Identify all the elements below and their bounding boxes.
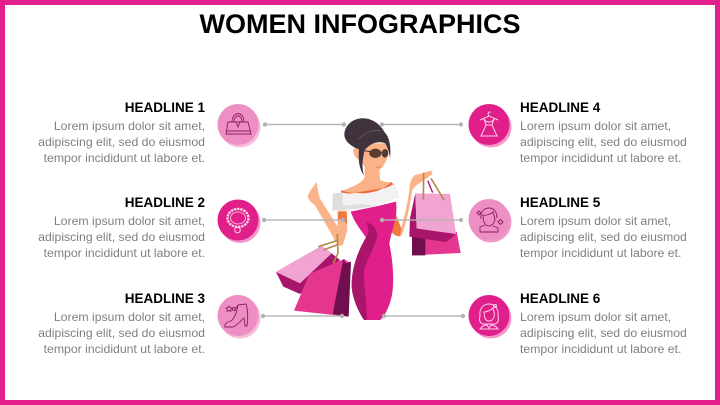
dress: [351, 202, 396, 320]
text block: headline 2: Lorem ipsum dolor sit amet,: [54, 214, 205, 228]
connector 2 left: [262, 218, 345, 222]
text block: headline 6: Lorem ipsum dolor sit amet,: [520, 310, 671, 324]
bag left pale: [276, 234, 340, 294]
text block: headline 2: [38, 195, 205, 260]
mouth: [375, 166, 381, 168]
icon: woman with sparkles: [468, 199, 512, 242]
icon: pearl necklace: [218, 200, 260, 243]
text block: headline 6: HEADLINE 6: [520, 291, 600, 306]
title: WOMEN INFOGRAPHICS: [200, 9, 520, 39]
icon: high heel shoe: [218, 295, 260, 338]
text block: headline 3: [38, 291, 205, 356]
text block: headline 4: adipiscing elit, sed do eiusmod: [520, 135, 687, 149]
text block: headline 4: Lorem ipsum dolor sit amet,: [520, 119, 671, 133]
text block: headline 2: adipiscing elit, sed do eiusmod: [38, 230, 205, 244]
icon: woman portrait: [468, 295, 512, 338]
connector 4 right: [380, 122, 463, 127]
text block: headline 5: [520, 195, 687, 260]
text block: headline 1: HEADLINE 1: [125, 100, 205, 115]
text block: headline 3: HEADLINE 3: [125, 291, 205, 306]
text block: headline 1: Lorem ipsum dolor sit amet,: [54, 119, 205, 133]
connector lines: [261, 122, 465, 318]
hair bun and strands: [344, 118, 390, 175]
text block: headline 2: tempor incididunt ut labore et.: [44, 246, 205, 260]
back bag right: [412, 232, 461, 255]
icon: dress on hanger: [468, 104, 512, 148]
text block: headline 3: Lorem ipsum dolor sit amet,: [54, 310, 205, 324]
text block: headline 4: [520, 100, 687, 165]
text block: headline 1: [38, 100, 205, 165]
white off-shoulder collar: [332, 183, 399, 211]
raised left arm: [308, 182, 347, 246]
connector 5 right: [380, 218, 463, 222]
text block: headline 3: tempor incididunt ut labore et.: [44, 342, 205, 356]
face: [361, 143, 388, 172]
right arm: [391, 170, 433, 236]
bag left dark: [294, 259, 351, 317]
text block: headline 6: adipiscing elit, sed do eiusmod: [520, 326, 687, 340]
text block: headline 3: adipiscing elit, sed do eiusmod: [38, 326, 205, 340]
sunglasses: [364, 149, 388, 158]
text block: headline 5: tempor incididunt ut labore et.: [520, 246, 681, 260]
text block: headline 4: HEADLINE 4: [520, 100, 600, 115]
text block: headline 1: adipiscing elit, sed do eiusmod: [38, 135, 205, 149]
text block: headline 6: [520, 291, 687, 356]
ear: [353, 147, 361, 160]
dress shading: [352, 223, 377, 320]
text block: headline 1: tempor incididunt ut labore et.: [44, 151, 205, 165]
connector 6 right: [382, 314, 465, 318]
text block: headline 6: tempor incididunt ut labore et.: [520, 342, 681, 356]
text block: headline 4: tempor incididunt ut labore et.: [520, 151, 681, 165]
connector 3 left: [261, 314, 344, 318]
connector 1 left: [263, 122, 346, 127]
text block: headline 5: Lorem ipsum dolor sit amet,: [520, 214, 671, 228]
text block: headline 5: adipiscing elit, sed do eiusmod: [520, 230, 687, 244]
collar shading: [332, 193, 375, 211]
front bag right: [409, 173, 456, 242]
text block: headline 2: HEADLINE 2: [125, 195, 205, 210]
icon: handbag: [218, 104, 260, 148]
neck and chest: [342, 162, 391, 195]
illustration: woman with shopping bags: [276, 118, 461, 320]
text block: headline 5: HEADLINE 5: [520, 195, 600, 210]
